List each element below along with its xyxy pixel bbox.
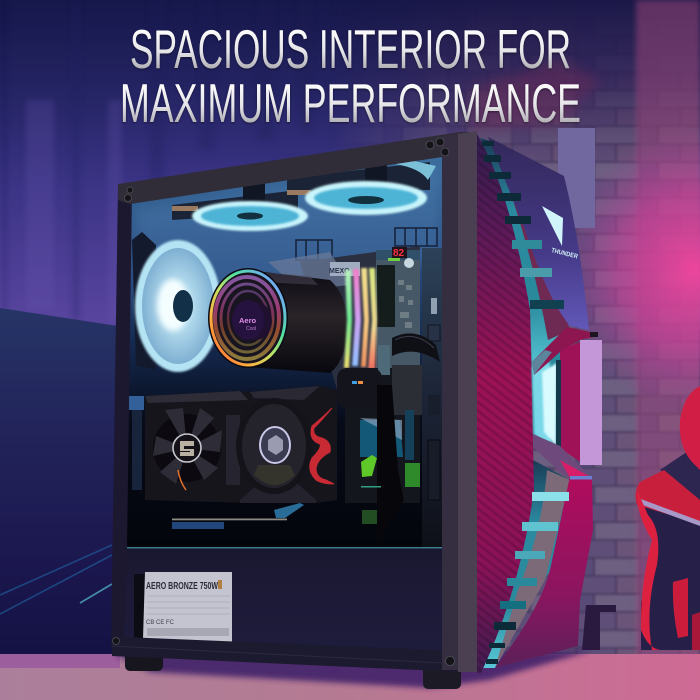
fan 2 hub logo bbox=[268, 435, 283, 455]
side carbon inset bbox=[560, 342, 580, 462]
dragon bbox=[310, 408, 334, 484]
cooler body bbox=[248, 270, 347, 373]
curtains bbox=[0, 0, 700, 330]
bottom rail bbox=[112, 636, 462, 672]
motherboard text: MEXO bbox=[329, 268, 350, 275]
graphics card bbox=[145, 386, 337, 503]
PCI slots bbox=[128, 396, 304, 529]
front panel bbox=[477, 134, 598, 673]
monitor bbox=[0, 308, 118, 654]
green ROG logo bbox=[361, 455, 377, 477]
title bbox=[120, 18, 581, 134]
teal channel upper bbox=[480, 138, 570, 372]
left fan bbox=[132, 232, 221, 372]
window interior bbox=[125, 157, 443, 548]
monitor highlight lines bbox=[0, 545, 112, 614]
top frame bbox=[118, 132, 476, 204]
upper spike bbox=[532, 327, 598, 375]
top fan 1 bbox=[172, 182, 308, 231]
lower wing panel bbox=[495, 476, 593, 668]
front frame strip dark bbox=[442, 134, 458, 670]
chair shoulder red bbox=[636, 470, 700, 524]
centre light bbox=[532, 350, 561, 450]
carbon panel bbox=[477, 134, 534, 673]
motherboard upper bbox=[268, 246, 442, 548]
teal channel lower bbox=[483, 460, 570, 668]
white pillars bbox=[558, 128, 602, 465]
left frame bbox=[111, 186, 132, 648]
PSU window bbox=[134, 574, 146, 640]
cooler logo: Aero bbox=[239, 316, 257, 325]
fan 1 hub logo bbox=[180, 441, 194, 456]
PSU label: AERO BRONZE 750W bbox=[146, 580, 218, 592]
debug digits bbox=[392, 247, 407, 259]
vent bars bbox=[482, 141, 569, 664]
rear ventilation grids bbox=[296, 228, 437, 260]
cables bbox=[392, 333, 440, 362]
top back plate highlight bbox=[135, 165, 440, 310]
brick wall bbox=[358, 0, 700, 654]
logo mark bbox=[542, 206, 563, 246]
logo text: THUNDER bbox=[551, 247, 579, 261]
frame screws bbox=[112, 138, 454, 666]
fan 2 bbox=[236, 398, 312, 494]
fan 1 bbox=[153, 408, 222, 490]
cooler logo: Cool bbox=[246, 326, 256, 332]
upper wing panel bbox=[488, 137, 589, 330]
table bbox=[0, 651, 700, 700]
PSU label bbox=[143, 572, 232, 642]
chair shoulder navy bbox=[660, 443, 700, 500]
RAM sticks bbox=[344, 268, 377, 369]
computer case chassis bbox=[111, 131, 480, 672]
lower shroud bbox=[124, 547, 445, 651]
motherboard lower bbox=[337, 333, 440, 540]
stool behind bbox=[582, 605, 616, 650]
top fan 2 bbox=[287, 160, 436, 215]
front frame strip light bbox=[458, 131, 480, 672]
debug digits: 82 bbox=[393, 248, 405, 259]
chair headrest bbox=[680, 386, 700, 470]
cooler logo bbox=[232, 300, 264, 340]
rainbow ring bbox=[211, 271, 285, 365]
lower spike bbox=[533, 434, 592, 478]
gaming chair bbox=[636, 386, 700, 650]
PSU label: CB CE FC bbox=[146, 620, 175, 626]
chair side trim bbox=[637, 490, 660, 650]
back panel cutouts bbox=[422, 248, 442, 548]
CPU cooler bbox=[208, 268, 347, 373]
chair body bbox=[641, 490, 700, 650]
case feet bbox=[125, 650, 461, 689]
